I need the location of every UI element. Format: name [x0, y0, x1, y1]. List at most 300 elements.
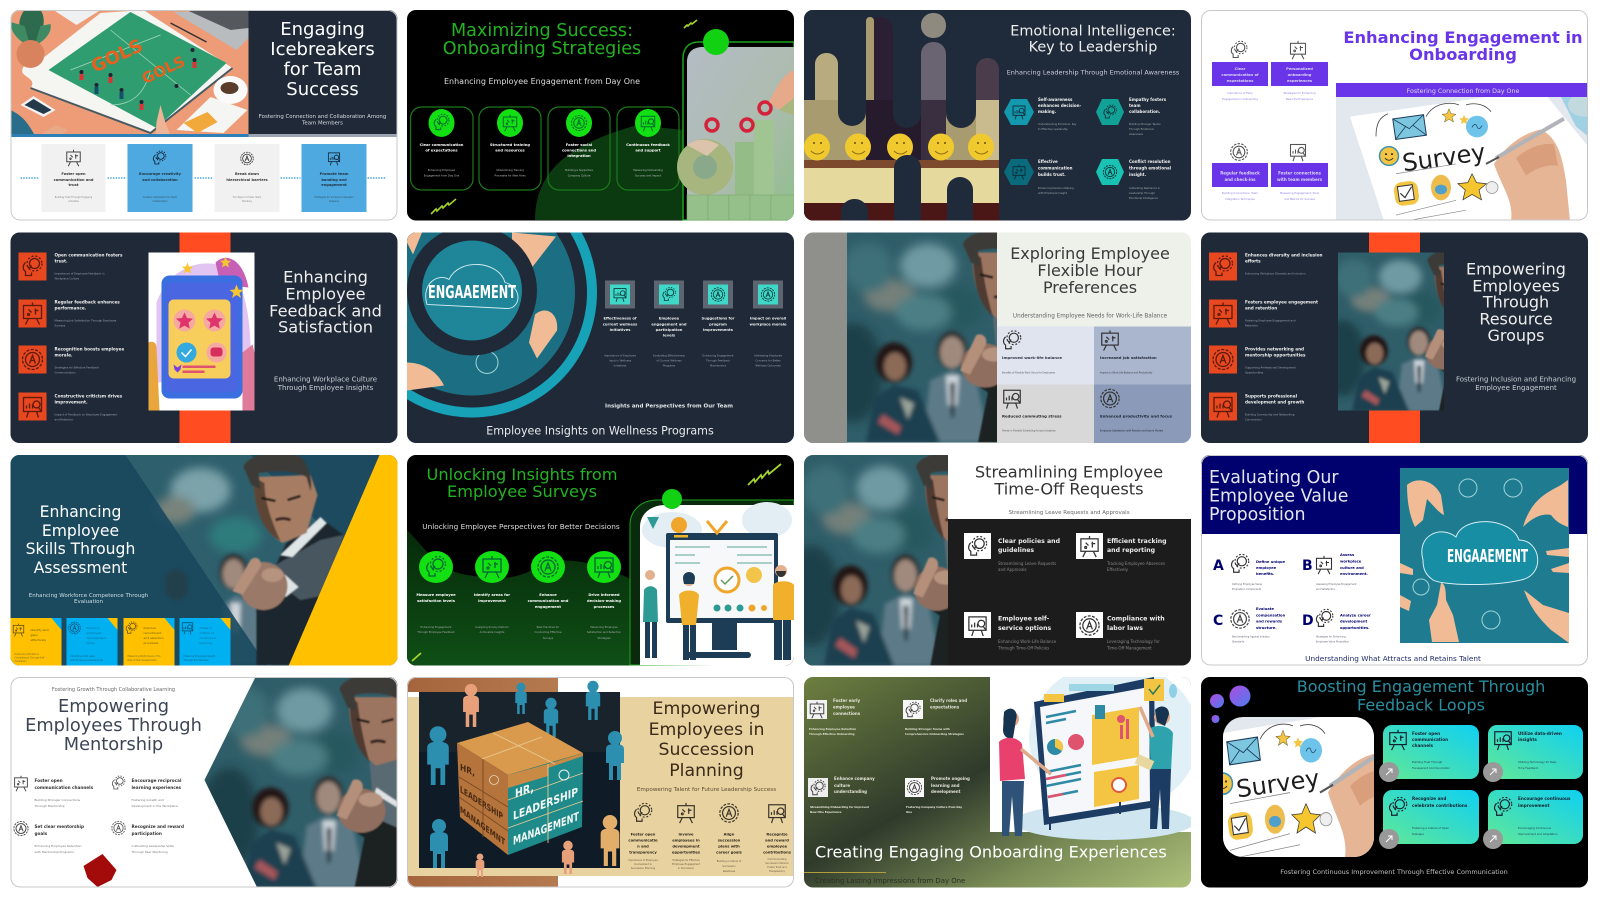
- item: self-awareness: enhances decision-: [1038, 103, 1081, 108]
- column: impact: [749, 280, 787, 368]
- item: enhance culture: New Hire Experience: [810, 810, 842, 814]
- item B: Assessing Employee Engagement: [1316, 583, 1356, 586]
- item A: A: [1213, 558, 1224, 574]
- card: break down barriers: Bonding: [242, 200, 252, 203]
- card: foster social connections: integration: [567, 154, 591, 158]
- item: clarify roles: Comprehensive Onboarding Strategies: [905, 732, 964, 736]
- item: self-service: Through Time-Off Policies: [997, 646, 1049, 650]
- item: networking: Opportunities: [1245, 370, 1264, 374]
- item A: [1213, 554, 1285, 591]
- card: personalized experiences: onboarding: [1288, 73, 1312, 77]
- item: regular feedback: [18, 300, 120, 328]
- item: diversity: Enhances diversity and inclusion: [1245, 252, 1322, 258]
- card: identify skill gaps: Identify skill: [30, 628, 49, 632]
- subtitle: [259, 114, 386, 124]
- item B: and Satisfaction: [1316, 588, 1336, 591]
- panel: Enhancing Engagement in Onboarding slide: [1201, 10, 1600, 221]
- item: self-awareness: [1004, 97, 1081, 131]
- column: suggestions: improvements: [703, 328, 734, 332]
- card: structured training: Processes for New Hires: [494, 174, 526, 178]
- card: clear communication: communication of: [1221, 73, 1259, 77]
- column: recognize contributions: Foster Trust and: [767, 866, 787, 869]
- card: foster connections: Measuring Engagement: Tools: [1280, 191, 1320, 195]
- subtitle: Fostering Growth Through Collaborative Learning: [52, 687, 175, 693]
- cell: job satisfaction: [1094, 326, 1191, 384]
- panel: Empowering Employees Through Mentorship slide: [10, 674, 398, 888]
- title: [1209, 468, 1348, 525]
- column: enhance communication: Best Practices for: [537, 625, 560, 629]
- card: identify skill gaps: effectively: [30, 638, 46, 642]
- item C: Standards: [1232, 640, 1245, 644]
- card: foster continuous learning: learning: [200, 641, 212, 645]
- item: conflict resolution: Emotional Intelligence: [1129, 196, 1158, 200]
- column: suggestions: Suggestions for: [702, 316, 735, 320]
- card: recognize contributions: Fostering a Culture of Open: [1412, 826, 1449, 830]
- column: effectiveness: initiatives: [610, 328, 631, 332]
- item D: D: [1302, 613, 1314, 629]
- card: foster open communication: communication and: [54, 178, 94, 182]
- photo: HR cube and figures: LEADERSHIP: [513, 785, 578, 823]
- item: foster early connections: employee: [833, 704, 855, 710]
- card: enhance development: Enhance: [86, 626, 100, 630]
- card: break down barriers: Fun Ways to Foster Team: [233, 196, 262, 199]
- title: Empowering: [653, 699, 760, 719]
- column: identify areas: Actionable Insights: [480, 630, 505, 634]
- photo: HR cube and figures: LEADERSHIP: [460, 785, 503, 823]
- card: foster open channels: Transparent Communication: [1411, 766, 1450, 770]
- item: empathy: [1096, 97, 1167, 136]
- card: continuous improvement: [1483, 790, 1583, 849]
- item: constructive criticism: Impact of Feedback on Employee Engagement: [54, 412, 117, 416]
- card: clear communication: Engagement in Onboarding: [1222, 97, 1258, 101]
- subtitle: Insights and Perspectives from Our Team: [605, 404, 733, 410]
- item: enhance culture: understanding: [834, 789, 867, 794]
- item: constructive criticism: and Retention: [54, 418, 74, 422]
- column: foster open communication: Involvement in: [634, 863, 652, 866]
- column: align succession: career goals: [716, 850, 743, 854]
- item: enhance culture: [808, 776, 875, 814]
- subtitle: Streamlining Leave Requests and Approvals: [1008, 510, 1130, 516]
- title: Flexible Hour: [1037, 261, 1143, 280]
- item: self-awareness: making.: [1038, 109, 1057, 114]
- column: effectiveness: Effectiveness of: [603, 316, 637, 320]
- subtitle: Enhancing Workplace Culture: [274, 376, 377, 384]
- item: networking: Supporting Professional Development: [1245, 366, 1296, 370]
- column: recognize contributions: Recognize: [766, 832, 788, 836]
- cell: commuting stress: Trends in Flexible Scheduling Across Industries: [1002, 430, 1056, 432]
- decorative zigzags: [412, 464, 781, 661]
- item: recognize participation: [112, 821, 184, 854]
- card: break down barriers: hierarchical barriers: [226, 178, 268, 182]
- item: clear policies: Streamlining Leave Requests: [998, 561, 1056, 566]
- item: effective communication: Enhancing Decision-Making: [1038, 186, 1074, 190]
- item: recognition: [18, 346, 124, 374]
- column: enhance communication: engagement: [535, 605, 561, 609]
- decorative zigzags: [431, 20, 697, 214]
- column: suggestions: program: [709, 322, 727, 326]
- item: compliance: labor laws: [1107, 625, 1143, 632]
- column: impact: Concerns for Better: [755, 358, 782, 362]
- column: involve employees: Employee Engagement: [672, 863, 700, 866]
- card: clear communication: of expectations: [425, 148, 458, 152]
- title: Onboarding: [1409, 45, 1517, 64]
- column: foster open communication: Importance of Employee: [628, 859, 658, 862]
- title: Onboarding Strategies: [443, 39, 641, 59]
- card: identify skill gaps: gaps: [30, 633, 38, 637]
- illustration: soccer goals desk: GOLS: [88, 35, 146, 77]
- card: recognize contributions: [1379, 790, 1479, 849]
- title: Employees Through: [25, 715, 202, 736]
- item B: B: [1302, 558, 1313, 574]
- card: break down barriers: [214, 144, 280, 212]
- card: improve recruitment: Improve: [144, 626, 156, 630]
- item: promote learning: Fostering Company Culture from Day: [906, 805, 962, 809]
- caption: Fostering Continuous Improvement Through Effective Communication: [1280, 868, 1508, 876]
- item: self-service: [964, 612, 1057, 650]
- panel: Employee Value Proposition slide: [1201, 455, 1588, 666]
- title: Enhancing: [283, 268, 368, 286]
- card: data-driven insights: insights: [1518, 737, 1537, 742]
- column: engagement: engagement and: [651, 322, 687, 326]
- card: continuous feedback: and support: [635, 148, 661, 152]
- column: measure satisfaction: Enhancing Engagement: [421, 625, 451, 629]
- item: reciprocal learning: learning experiences: [132, 785, 182, 790]
- subtitle: Team Members: [301, 120, 343, 126]
- card: encourage creativity: and collaboration: [142, 178, 178, 182]
- item: open communication: Workplace Culture: [54, 276, 80, 280]
- title: [443, 21, 641, 59]
- item B: environment.: [1340, 572, 1369, 576]
- title: [272, 22, 374, 96]
- card: foster open communication: trust: [69, 183, 79, 187]
- item C: structure.: [1256, 626, 1277, 630]
- title: Feedback Loops: [1357, 696, 1485, 714]
- panel: Succession Planning slide: [407, 677, 794, 888]
- subtitle: Employee Engagement: [1475, 384, 1557, 392]
- card: personalized experiences: experiences: [1287, 79, 1313, 83]
- item: recognition: Recognition boosts employee: [54, 346, 124, 352]
- column: engagement: Programs: [663, 364, 676, 368]
- card: enhance development: with Employee Assessments: [70, 659, 104, 662]
- column: suggestions: Enhancing Engagement: [703, 354, 733, 358]
- caption: Understanding What Attracts and Retains Talent: [1305, 654, 1481, 663]
- item: self-awareness: to Effective Leadership: [1038, 127, 1068, 131]
- item: promote learning: One: [906, 810, 912, 814]
- item: networking: mentorship opportunities: [1245, 352, 1306, 358]
- card: improve recruitment: Measuring Performance: The: [128, 655, 161, 658]
- column: impact: Impact on overall: [750, 316, 786, 320]
- photo: smiling egg figures: [804, 10, 999, 220]
- item A: Defining Employee Value: [1232, 583, 1262, 586]
- column: align succession: [716, 804, 743, 873]
- decorative red polygon: [84, 854, 116, 887]
- card: data-driven insights: Time Feedback: [1517, 766, 1539, 770]
- card: personalized experiences: [1271, 41, 1328, 101]
- title: Through: [1482, 292, 1549, 312]
- item: clarify roles: expectations: [930, 704, 960, 710]
- cell: productivity: Enhanced productivity and focus: [1100, 414, 1173, 418]
- title: Mentorship: [64, 734, 163, 755]
- title: Planning: [669, 761, 744, 781]
- card: clear communication: Enhancing Employee: [428, 168, 456, 172]
- title: Enhancing Engagement in: [1343, 28, 1583, 47]
- item: foster early connections: connections: [833, 711, 861, 716]
- card: improve recruitment: [124, 618, 174, 666]
- card: foster continuous learning: continuous: [200, 636, 216, 640]
- title: for Team: [283, 59, 362, 80]
- title: Succession: [659, 740, 754, 760]
- item: conflict resolution: Cultivating Resilience in: [1129, 186, 1160, 190]
- item: recognize participation: Through Peer Mentoring: [130, 850, 168, 854]
- illustration: engagement hands: [1400, 468, 1569, 643]
- item: empathy: Awareness: [1129, 132, 1144, 136]
- item: clarify roles: Building Stronger Teams with: [905, 727, 950, 731]
- panel: Enhancing Employee Skills slide: [10, 453, 398, 666]
- title: Feedback and: [269, 302, 382, 320]
- item C: [1213, 607, 1286, 644]
- card: foster open communication: Building Trust Through Engaging: [55, 196, 93, 199]
- column: recognize contributions: [763, 805, 792, 873]
- card: foster continuous learning: Foster a: [200, 626, 212, 630]
- item: conflict resolution: Conflict resolution: [1129, 159, 1171, 164]
- title: [1344, 31, 1582, 64]
- card: identify skill gaps: Enhancing Workforce: [14, 653, 39, 656]
- card: enhance development: development: [86, 636, 107, 640]
- card: foster continuous learning: Fostering Employee Growth: [184, 655, 216, 658]
- card: data-driven insights: Utilize data-driven: [1518, 731, 1562, 736]
- card: foster continuous learning: Through Skill Reviews: [184, 659, 209, 662]
- item: open communication: Open communication fosters: [54, 252, 123, 258]
- card: enhance development: employee: [86, 631, 101, 635]
- column: impact: Wellness Outcomes: [755, 364, 781, 368]
- card: enhance development: Identifying Skill Gaps: [70, 655, 96, 658]
- title: Evaluating Our: [1209, 468, 1339, 488]
- item: mentorship goals: goals: [34, 831, 48, 836]
- card: foster open communication: [42, 144, 106, 212]
- title: Empowering: [1466, 260, 1566, 278]
- card: continuous improvement: Encouraging Continuous: [1518, 826, 1551, 830]
- card: clear communication: Clear communication: [420, 143, 464, 147]
- item: empathy: team: [1129, 103, 1140, 108]
- card: regular feedback: Regular feedback: [1220, 170, 1260, 176]
- column: effectiveness: Importance of Employee: [604, 354, 636, 358]
- item: networking: [1209, 346, 1306, 374]
- title: Time-Off Requests: [993, 480, 1144, 498]
- column: recognize contributions: contributions: [763, 850, 792, 854]
- card: personalized experiences: Personalized: [1286, 67, 1313, 71]
- item: enhance culture: culture: [834, 783, 850, 788]
- item: development: [1209, 392, 1304, 422]
- item: networking: Provides networking and: [1245, 346, 1304, 352]
- card: clear communication: Engagement from Day One: [424, 174, 460, 178]
- item: reciprocal learning: [112, 776, 182, 808]
- cell: job satisfaction: Increased job satisfaction: [1100, 355, 1157, 360]
- illustration: soccer goals desk: GOLS: [139, 52, 188, 88]
- item: diversity: [1209, 252, 1322, 280]
- card: foster open channels: Foster open: [1412, 731, 1440, 736]
- subtitle: Fostering Connection and Collaboration Among: [259, 114, 386, 120]
- column: measure satisfaction: Through Employee Feedback: [417, 630, 455, 634]
- subtitle: Evaluation: [74, 599, 104, 605]
- column: effectiveness: [603, 280, 638, 368]
- item B: Assess: [1340, 553, 1355, 557]
- card: foster open channels: channels: [1412, 743, 1434, 748]
- panel: Maximizing Success slide: [407, 10, 794, 220]
- item: development: Connections: [1245, 418, 1262, 422]
- panel: Streamlining Time-Off slide: [783, 452, 1191, 666]
- item: clear policies: [964, 533, 1060, 572]
- card: data-driven insights: Utilizing Technology for Real-: [1518, 760, 1557, 764]
- title: Enhancing: [40, 503, 121, 521]
- title: [25, 696, 202, 755]
- title: [649, 699, 764, 781]
- item: constructive criticism: [18, 392, 123, 422]
- column: measure satisfaction: satisfaction levels: [417, 599, 456, 603]
- photo: HR cube and figures: HR,: [515, 780, 534, 801]
- column: impact: Addressing Employee: [754, 354, 782, 358]
- illustration: engagement circle: [347, 168, 597, 418]
- item: effective communication: builds trust.: [1038, 172, 1066, 177]
- column: foster open communication: transparency: [629, 850, 657, 854]
- photo: HR cube and figures: MANAGEMNT: [460, 805, 505, 848]
- card: foster open channels: Building Trust Through: [1412, 760, 1443, 764]
- subtitle: Unlocking Employee Perspectives for Better Decisions: [422, 522, 620, 531]
- item: promote learning: [905, 776, 970, 814]
- card: continuous feedback: Measuring Onboarding: [633, 168, 663, 172]
- subtitle: Enhancing Workforce Competence Through: [29, 593, 149, 599]
- column: engagement: of Current Wellness: [656, 358, 682, 362]
- column: suggestions: Through Feedback: [706, 358, 730, 362]
- column: recognize contributions: Succession Plans to: [765, 862, 789, 865]
- item A: Define unique: [1256, 560, 1285, 564]
- card: recognize contributions: Dialogue: [1412, 832, 1424, 836]
- item: engagement: Fosters employee engagement: [1245, 300, 1318, 304]
- column: align succession: Readiness: [723, 870, 736, 873]
- item: engagement: [1209, 300, 1318, 328]
- item: effective communication: Effective: [1038, 159, 1058, 164]
- photo: HR cube and figures: HR,: [460, 762, 475, 779]
- item: constructive criticism: improvement.: [54, 400, 88, 404]
- item: foster open channels: [15, 776, 94, 808]
- item: efficient tracking: [1076, 533, 1167, 572]
- column: drive decisions: Strategies: [597, 636, 611, 640]
- item: mentorship goals: [14, 821, 84, 854]
- column: identify areas: [474, 551, 510, 634]
- column: suggestions: Mechanisms: [710, 364, 727, 368]
- item: diversity: Enhancing Workplace Diversity and Inclusion: [1245, 272, 1306, 276]
- photo: man pointing: [1338, 252, 1444, 410]
- item C: compensation: [1256, 614, 1286, 618]
- illustration: dashboard board with two people: [990, 662, 1199, 840]
- panel: Creating Engaging Onboarding slide: [804, 662, 1199, 888]
- item: foster early connections: Foster early: [833, 698, 860, 703]
- item: conflict resolution: insight.: [1129, 172, 1147, 177]
- title: Maximizing Success:: [451, 21, 633, 41]
- item: foster early connections: Enhancing Employee Retention: [809, 727, 856, 731]
- item: regular feedback: Regular feedback enhances: [54, 300, 120, 304]
- item: engagement: Fostering Employee Engagement and: [1245, 318, 1296, 322]
- column: engagement: participation: [656, 328, 683, 332]
- item: enhance culture: Streamlining Onboarding for Improved: [810, 805, 869, 809]
- card: promote team bonding: Promote team: [320, 172, 349, 176]
- panel: Emotional Intelligence slide: [804, 10, 1191, 220]
- item: regular feedback: performance.: [54, 306, 87, 310]
- column: align succession: Succession: [722, 865, 736, 868]
- column: effectiveness: current wellness: [603, 322, 638, 326]
- title: Employees: [1472, 276, 1560, 296]
- item D: opportunities.: [1340, 626, 1370, 630]
- item: clarify roles: Clarify roles and: [930, 698, 967, 703]
- subtitle: Fostering Inclusion and Enhancing: [1456, 376, 1576, 384]
- card: continuous feedback: Success and Impact: [635, 174, 661, 178]
- column: enhance communication: Surveys: [543, 636, 554, 640]
- card: foster social connections: Foster social: [566, 143, 592, 147]
- column: enhance communication: communication and: [528, 599, 569, 603]
- item: mentorship goals: Enhancing Employee Retention: [34, 844, 82, 848]
- card: encourage creativity: Encourage creativity: [139, 172, 182, 176]
- card: foster connections: Foster connections: [1278, 170, 1322, 176]
- item B: workplace: [1340, 560, 1362, 564]
- column: identify areas: Identify areas for: [474, 593, 510, 597]
- column: drive decisions: Drive informed: [588, 593, 620, 597]
- item: regular feedback: Measuring Job Satisfaction Through Employee: [54, 318, 117, 322]
- item: open communication: [18, 252, 123, 280]
- title: Preferences: [1043, 278, 1137, 297]
- column: measure satisfaction: [416, 551, 456, 634]
- card: promote team bonding: bonding and: [321, 178, 347, 182]
- item: foster early connections: Through Effective Onboarding: [809, 732, 855, 736]
- subtitle: Enhancing Employee Engagement from Day One: [444, 77, 640, 86]
- card: foster open communication: Activities: [68, 200, 80, 203]
- card: structured training: and resources: [495, 148, 526, 152]
- title: Skills Through: [26, 540, 135, 558]
- photo: man pointing: [847, 232, 997, 442]
- title: Unlocking Insights from: [426, 465, 618, 484]
- column: impact: workplace morale: [749, 322, 787, 326]
- column: drive decisions: processes: [594, 605, 615, 609]
- card: foster social connections: connections and: [562, 148, 596, 152]
- title: Boosting Engagement Through: [1297, 677, 1545, 696]
- item: clarify roles: [903, 698, 967, 736]
- item: conflict resolution: through emotional: [1129, 166, 1172, 170]
- card: regular feedback: Building Connections: Team: [1222, 191, 1258, 195]
- illustration: engagement hands: ENGAAEMENT: [1447, 546, 1528, 567]
- item: clear policies: and Approvals: [998, 567, 1027, 572]
- column: suggestions: [702, 280, 735, 368]
- cell: work-life balance: Improved work-life balance: [1002, 355, 1062, 360]
- column: involve employees: [672, 803, 701, 870]
- band: subtitle: [1336, 83, 1588, 97]
- title: Assessment: [34, 559, 127, 577]
- photo: survey: Survey: [1401, 138, 1487, 177]
- item: mentorship goals: Set clear mentorship: [34, 824, 84, 829]
- panel: Boosting Engagement Feedback Loops slide: [1170, 677, 1588, 888]
- item: effective communication: with Emotional Insight: [1038, 191, 1067, 195]
- item A: employee: [1256, 566, 1277, 570]
- item: clear policies: Clear policies and: [998, 538, 1060, 545]
- title: Groups: [1487, 326, 1545, 345]
- column: enhance communication: Enhance: [539, 593, 557, 597]
- column: recognize contributions: Transparency: [769, 870, 786, 873]
- title: Emotional Intelligence:: [1010, 24, 1176, 40]
- item: efficient tracking: and reporting: [1107, 547, 1155, 554]
- item: regular feedback: Surveys: [54, 324, 66, 328]
- item: diversity: efforts: [1245, 258, 1261, 264]
- column: enhance communication: [528, 551, 569, 640]
- item: development: Building Community and Networking: [1245, 412, 1295, 416]
- card: continuous feedback: [617, 107, 679, 190]
- item C: Evaluate: [1256, 607, 1275, 611]
